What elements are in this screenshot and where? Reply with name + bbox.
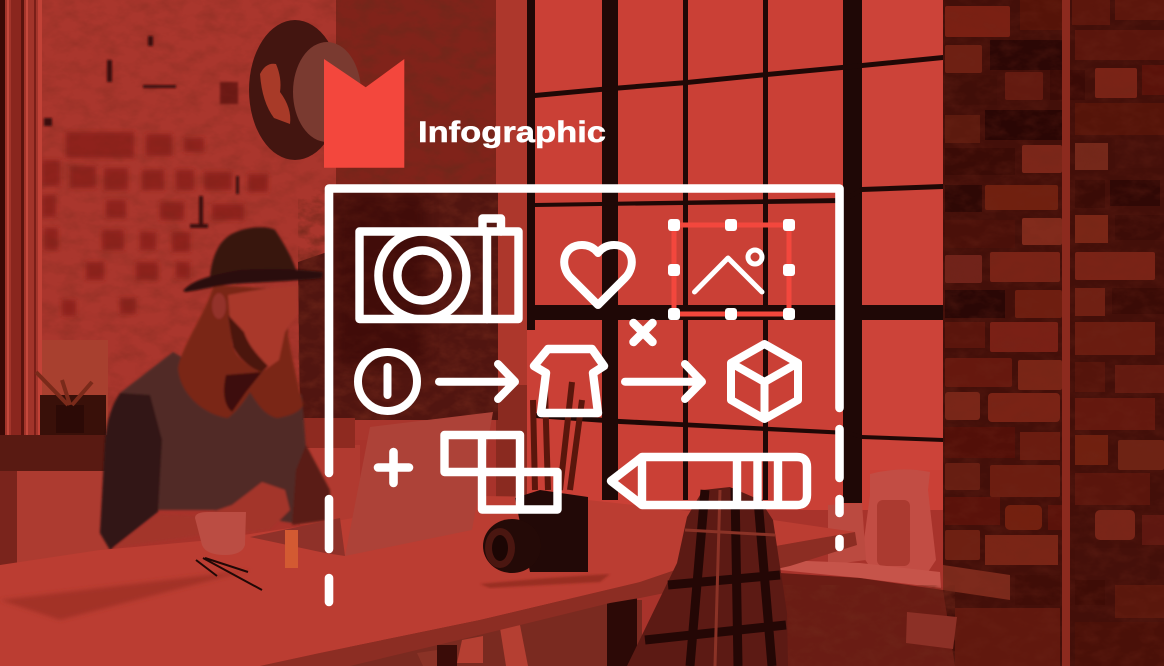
bricks: [943, 0, 1164, 666]
icon: image selection: [668, 219, 795, 320]
coffee cup: [195, 512, 246, 555]
wall below sill: [700, 568, 957, 666]
hat: [183, 227, 323, 292]
icon: overlapping boxes: [444, 435, 558, 510]
man with hat: [100, 227, 330, 550]
pipes at far left: [0, 0, 42, 436]
logo mark: [324, 59, 404, 168]
table front face: [260, 532, 857, 666]
forearm and hand: [113, 482, 290, 548]
icon: camera: [360, 218, 518, 320]
wall clock: [249, 20, 361, 160]
sill: [780, 560, 941, 588]
window: [527, 0, 943, 588]
photo camera on table: [483, 490, 588, 573]
shirt: [100, 352, 306, 550]
window frame bars: [527, 0, 943, 503]
arrow: shirt to cube: [625, 364, 702, 399]
table top: [0, 496, 855, 666]
vertical pipe: [1062, 0, 1070, 666]
jars on sill: [828, 469, 936, 572]
beard: [228, 315, 268, 372]
arrow: power to shirt: [439, 364, 515, 399]
icon: pencil: [611, 457, 807, 505]
laptop: [250, 412, 493, 556]
logo wordmark: Infographic: [418, 116, 606, 149]
paint tube: [285, 530, 298, 568]
sawhorse legs: [417, 596, 637, 666]
ear: [212, 293, 226, 319]
plaid shirt on chair: [627, 487, 788, 666]
hair: [178, 285, 303, 418]
face: [228, 285, 298, 372]
dark foliage behind the man: [298, 190, 498, 420]
icon: plus sign: [378, 452, 409, 483]
brick wall right: [943, 0, 1164, 666]
icon: cube: [731, 344, 798, 419]
table: [0, 496, 857, 666]
brick wall left: [0, 0, 530, 500]
wall scuffs: [44, 36, 239, 228]
shelf and lower wall: [0, 340, 360, 571]
icon: heart: [564, 245, 632, 305]
dashed frame: [329, 188, 840, 602]
tattooed far arm: [292, 445, 330, 525]
power socket: [906, 612, 957, 649]
brushes in jar: [533, 382, 582, 490]
dark mottled wall section: [336, 0, 496, 200]
pillar beside window: [496, 0, 528, 440]
pens: [196, 558, 262, 590]
icon: power circle: [358, 352, 417, 411]
pot with brushes: [36, 340, 108, 435]
icon: t-shirt: [534, 349, 604, 413]
under-table wall: [350, 600, 642, 666]
icon: multiply sign: [634, 323, 652, 342]
